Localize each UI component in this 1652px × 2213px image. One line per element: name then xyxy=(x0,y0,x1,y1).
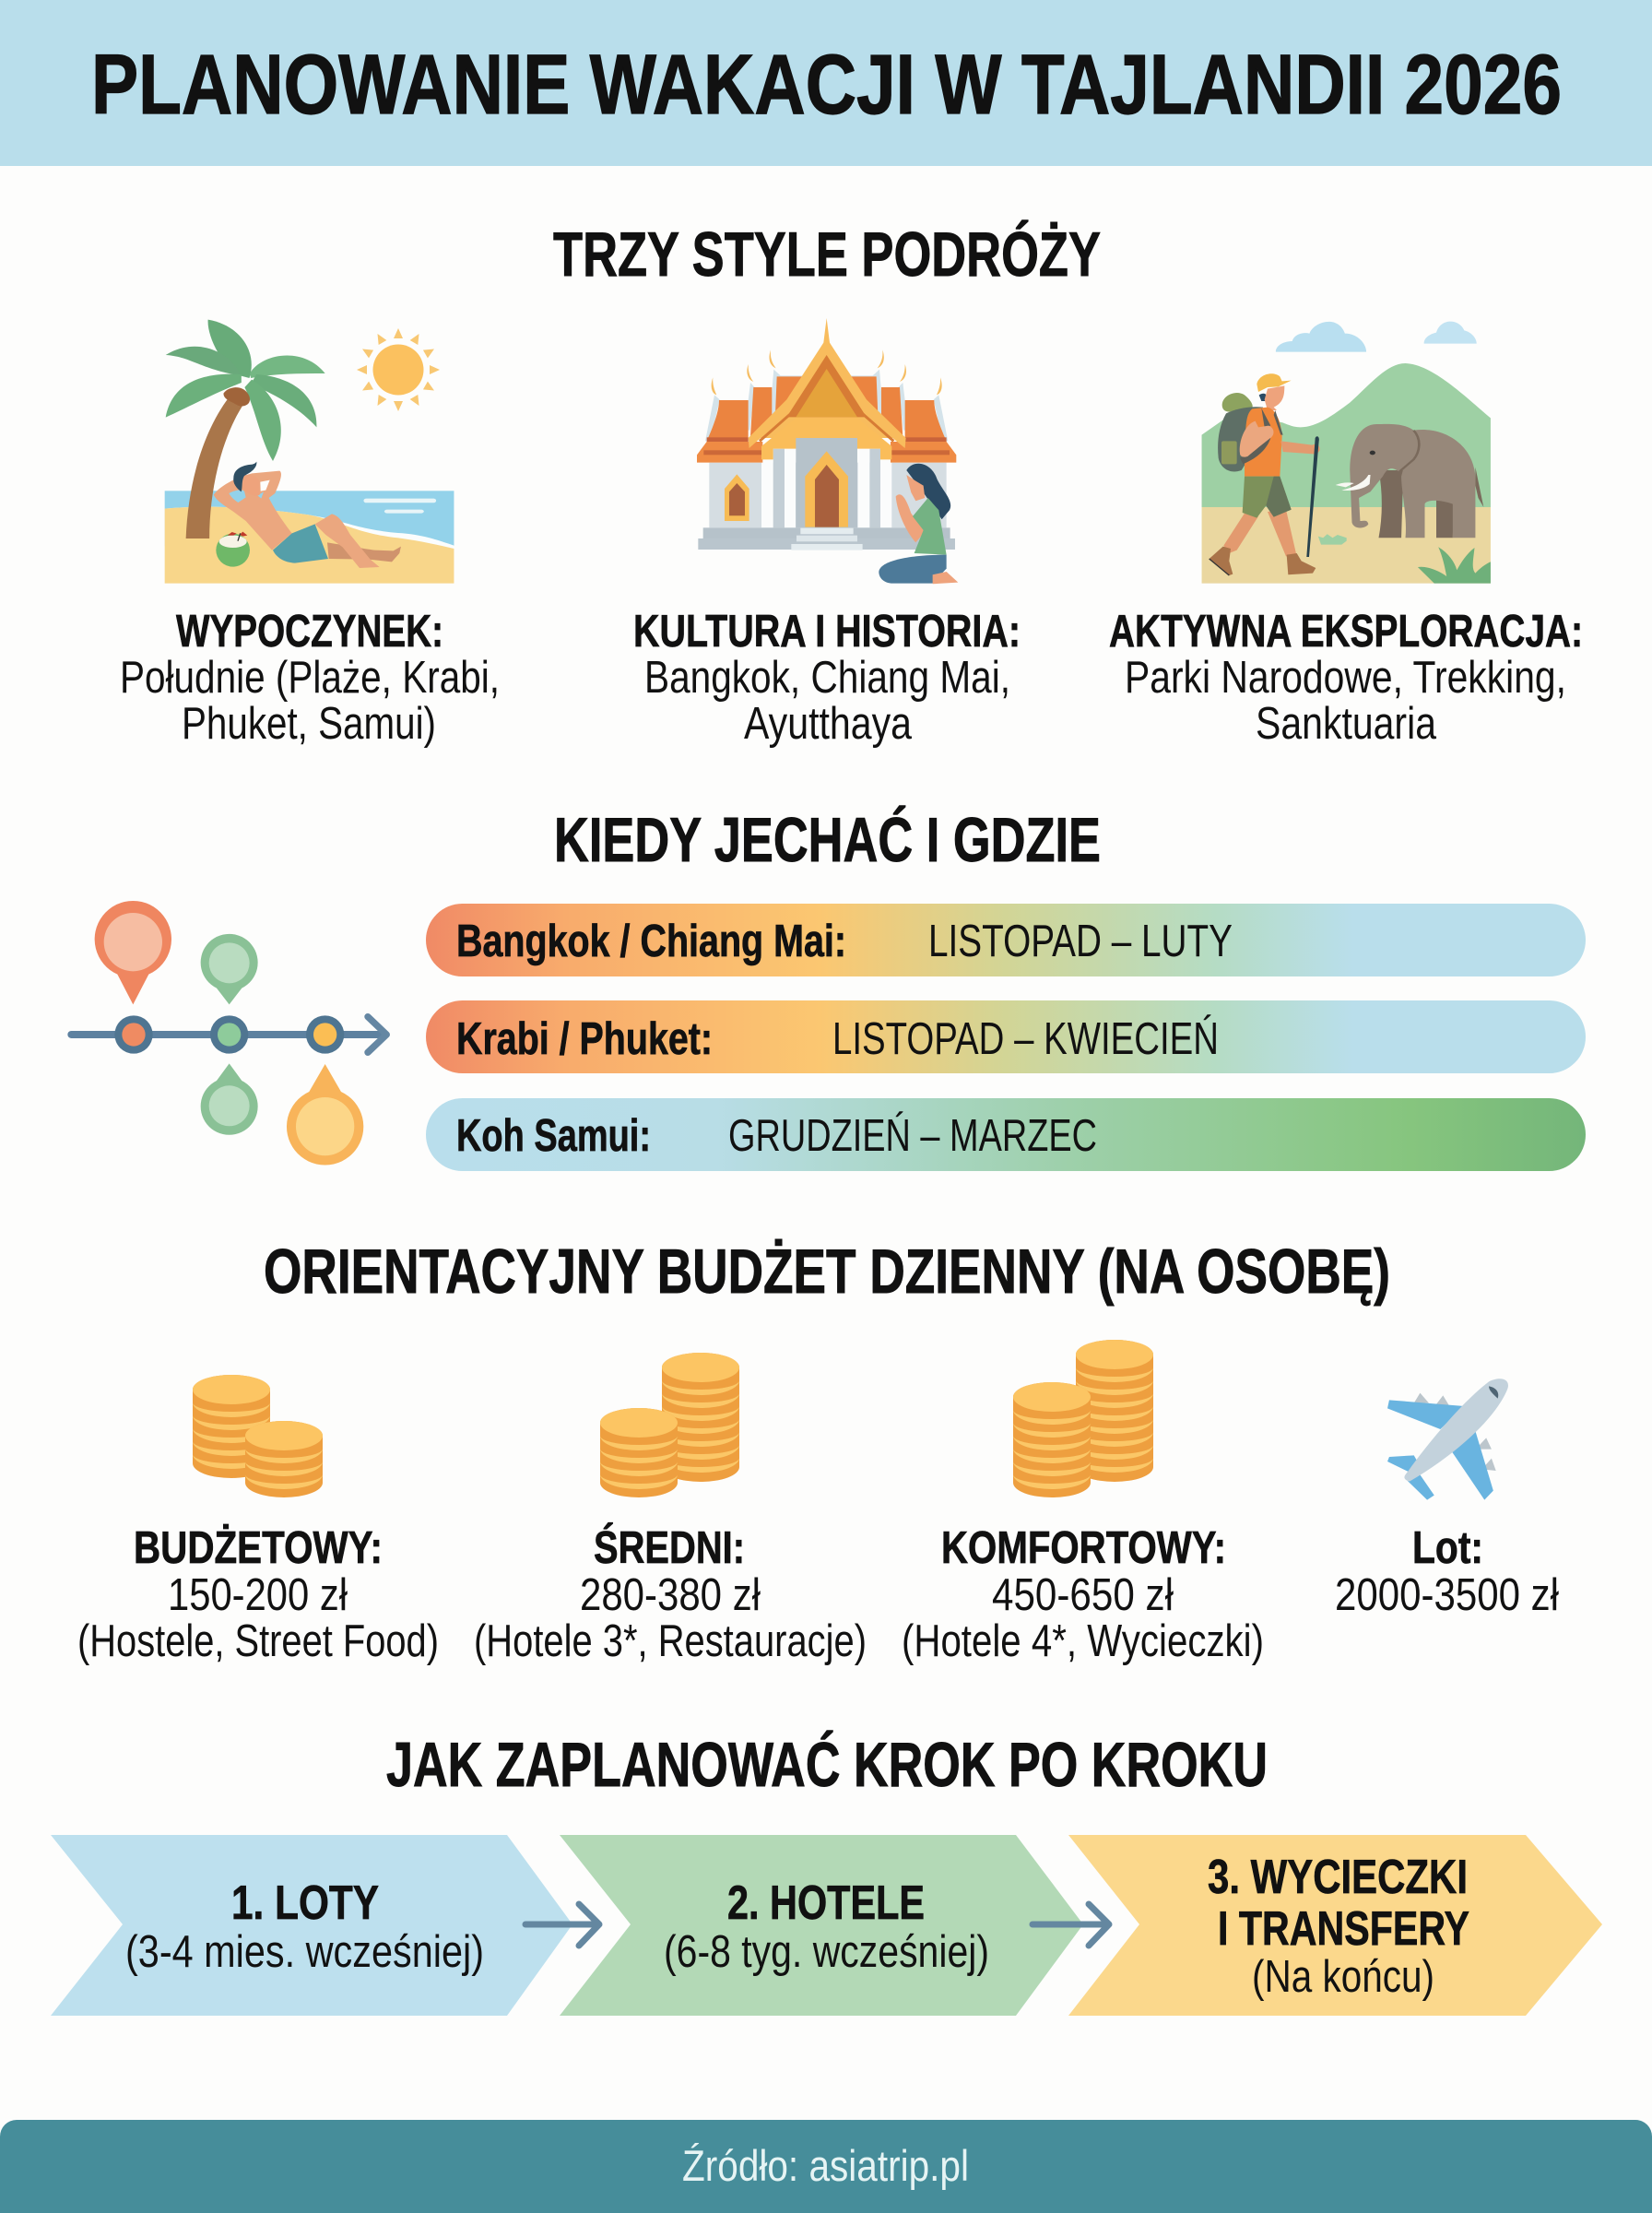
step 2: hotels xyxy=(560,1835,1083,2016)
step 1: flights: 1. LOTY xyxy=(231,1876,379,1930)
card text: culture xyxy=(633,607,1021,749)
season bar: Koh Samui: Koh Samui: xyxy=(456,1111,651,1161)
icon: large coin stacks xyxy=(1013,1340,1153,1497)
icon: beach relaxation scene xyxy=(165,320,454,584)
card text: active exploration: Sanktuaria xyxy=(1256,699,1437,749)
budget text: low: BUDŻETOWY: xyxy=(134,1523,383,1573)
section heading: step by step: JAK ZAPLANOWAĆ KROK PO KROKU xyxy=(386,1730,1268,1800)
card text: relaxation: WYPOCZYNEK: xyxy=(176,607,443,657)
icon: airplane xyxy=(1387,1379,1508,1500)
budget text: low xyxy=(77,1523,439,1666)
step 3: trips and transfers xyxy=(1068,1835,1602,2016)
icon: timeline with pins xyxy=(71,901,386,1166)
card text: culture: KULTURA I HISTORIA: xyxy=(633,607,1021,657)
step 3: trips and transfers: (Na końcu) xyxy=(1252,1952,1434,2002)
icon: small coin stacks xyxy=(193,1375,323,1497)
season bar: Bangkok / Chiang Mai: LISTOPAD – LUTY xyxy=(928,917,1233,966)
budget text: flight: Lot: xyxy=(1412,1523,1483,1573)
season bar: Krabi / Phuket: LISTOPAD – KWIECIEŃ xyxy=(832,1014,1219,1064)
icon: temple with praying woman xyxy=(697,318,958,584)
card text: active exploration: Parki Narodowe, Trekking, xyxy=(1125,653,1566,703)
budget text: medium: ŚREDNI: xyxy=(594,1522,745,1573)
icon: hiker and elephant xyxy=(1202,322,1491,584)
header band xyxy=(0,0,1652,166)
card text: relaxation: Południe (Plaże, Krabi, xyxy=(120,653,500,703)
icon: medium coin stacks xyxy=(600,1353,739,1497)
budget text: medium: (Hotele 3*, Restauracje) xyxy=(474,1616,867,1666)
budget text: low: (Hostele, Street Food) xyxy=(77,1616,439,1666)
card text: relaxation: Phuket, Samui) xyxy=(182,699,436,749)
budget text: comfort: (Hotele 4*, Wycieczki) xyxy=(902,1616,1264,1666)
footer xyxy=(0,2120,1652,2213)
budget text: flight: 2000-3500 zł xyxy=(1335,1570,1559,1620)
season bar: Koh Samui: GRUDZIEŃ – MARZEC xyxy=(728,1111,1097,1161)
step 1: flights xyxy=(51,1835,572,2016)
step 1: flights: (3-4 mies. wcześniej) xyxy=(125,1927,484,1977)
section heading: when and where: KIEDY JECHAĆ I GDZIE xyxy=(554,805,1101,875)
budget text: medium xyxy=(474,1522,867,1666)
step 3: trips and transfers: I TRANSFERY xyxy=(1218,1902,1469,1956)
card text: relaxation xyxy=(120,607,500,749)
budget text: medium: 280-380 zł xyxy=(580,1570,761,1620)
footer: Źródło: asiatrip.pl xyxy=(682,2141,969,2190)
card text: culture: Bangkok, Chiang Mai, xyxy=(644,653,1010,703)
arrow: step 2 to 3 xyxy=(1032,1904,1109,1946)
arrow: step 1 to 2 xyxy=(525,1904,599,1946)
budget text: comfort: 450-650 zł xyxy=(992,1570,1174,1620)
budget text: comfort xyxy=(902,1523,1264,1666)
season bar: Bangkok / Chiang Mai: Bangkok / Chiang Mai: xyxy=(456,917,846,966)
season bar: Bangkok / Chiang Mai xyxy=(426,904,1586,976)
season bar: Koh Samui xyxy=(426,1098,1586,1171)
season bar: Krabi / Phuket: Krabi / Phuket: xyxy=(456,1014,713,1064)
season bar: Krabi / Phuket xyxy=(426,1000,1586,1073)
section heading: travel styles: TRZY STYLE PODRÓŻY xyxy=(553,219,1101,290)
step 3: trips and transfers: 3. WYCIECZKI xyxy=(1208,1851,1468,1904)
budget text: flight xyxy=(1335,1523,1559,1620)
card text: active exploration xyxy=(1109,607,1583,749)
step 2: hotels: 2. HOTELE xyxy=(727,1876,925,1930)
budget text: low: 150-200 zł xyxy=(168,1570,348,1620)
budget text: comfort: KOMFORTOWY: xyxy=(941,1523,1226,1573)
step 2: hotels: (6-8 tyg. wcześniej) xyxy=(664,1927,989,1977)
card text: culture: Ayutthaya xyxy=(744,699,913,749)
